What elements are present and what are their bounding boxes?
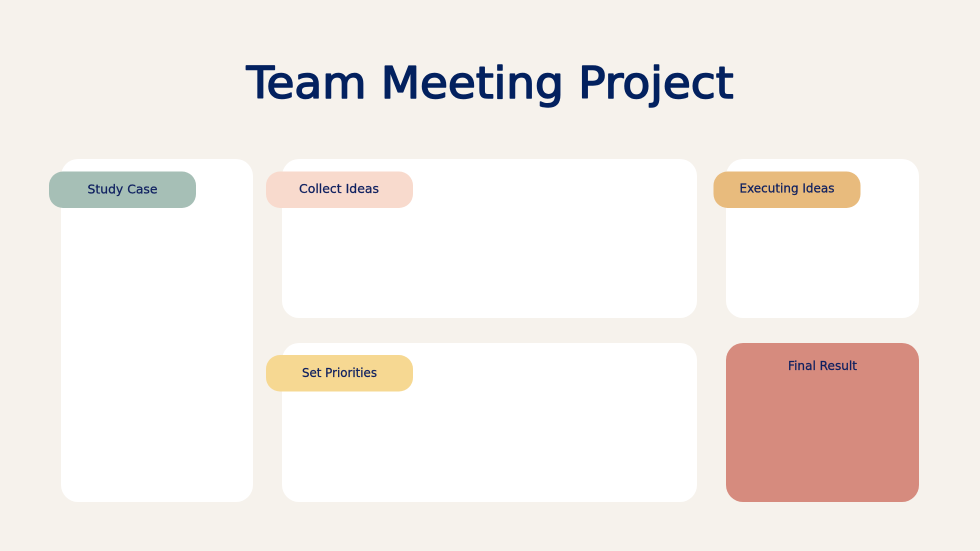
panel: final result (726, 343, 919, 502)
panel: final result: Final Result (788, 358, 857, 373)
label: executing ideas (714, 172, 860, 208)
panel: set priorities (282, 343, 697, 502)
title: Team Meeting Project (245, 58, 734, 109)
label: set priorities (266, 355, 413, 392)
label: executing ideas: Executing Ideas (740, 181, 834, 196)
label: collect ideas: Collect Ideas (299, 181, 379, 196)
panel: study case (61, 159, 253, 502)
label: collect ideas (266, 172, 413, 208)
label: set priorities: Set Priorities (302, 365, 377, 380)
label: study case (49, 172, 196, 208)
label: study case: Study Case (88, 182, 158, 197)
panel: executing ideas (726, 159, 919, 318)
panel: collect ideas (282, 159, 697, 318)
